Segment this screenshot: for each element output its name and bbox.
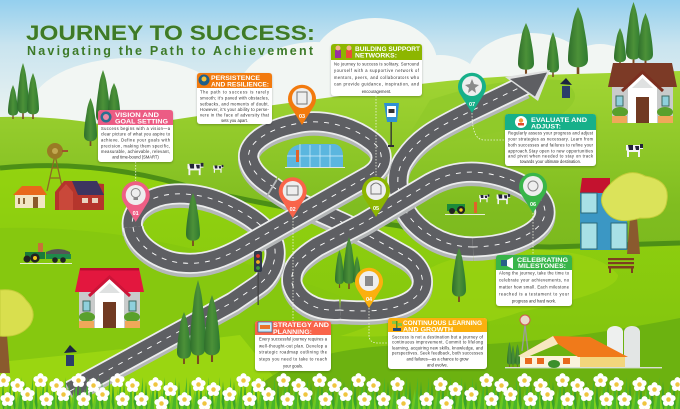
trees on road [177, 193, 466, 364]
card: celebrating milestones: reached is a testament to your [499, 292, 570, 296]
card: building support networks: can provide guidance, inspiration, and [334, 82, 420, 86]
windmill [47, 143, 68, 191]
card: strategy and planning: Every successful journey requires a [259, 336, 328, 342]
card: celebrating milestones: matter how small. Each milestone [499, 284, 570, 290]
card: building support networks: mentors, peers, and collaborators who [334, 75, 420, 80]
pin 04: 04 [366, 297, 373, 303]
card: evaluate and adjust: EVALUATE AND [531, 117, 587, 124]
card: vision and goal setting [98, 110, 173, 162]
card: building support networks: yourself with a supportive network of [334, 68, 420, 73]
road: start and left loop top [70, 194, 275, 394]
card: evaluate and adjust: towards your ultimate destination. [520, 159, 581, 164]
card: persistence and resilience: PERSISTENCE [211, 75, 261, 82]
trash bins [64, 78, 572, 366]
pin 01: 01 [133, 211, 139, 217]
card: vision and goal setting: precision, making them specific, [101, 144, 170, 148]
card: evaluate and adjust: approach.Stay open to new opportunities [508, 148, 593, 154]
red barn [55, 181, 104, 210]
card: building support networks: encouragement. [362, 89, 391, 94]
dotted connectors [136, 96, 533, 343]
card: strategy and planning: STRATEGY AND [273, 322, 329, 329]
icon: megaphone [501, 257, 513, 269]
pin 02: 02 [290, 207, 296, 213]
card: evaluate and adjust: ADJUST: [531, 124, 561, 130]
red roof house [75, 268, 144, 328]
pin 07 [458, 73, 486, 113]
icon: monitor [258, 322, 272, 332]
icon: plant growth [392, 321, 402, 331]
card: celebrating milestones: Along the journey, take the time to [499, 270, 570, 276]
card: building support networks: NETWORKS: [355, 52, 397, 60]
field waves [0, 228, 680, 409]
card: strategy and planning [255, 321, 331, 371]
icon: target head [100, 112, 112, 122]
card: vision and goal setting: VISION AND [115, 112, 159, 119]
card: vision and goal setting: GOAL SETTING [115, 118, 168, 126]
road: lower middle loop [272, 186, 422, 314]
pin 07: 07 [469, 102, 475, 108]
pin 05: 05 [373, 206, 379, 212]
clouds [30, 18, 640, 162]
icon: people [335, 46, 352, 58]
card: celebrating milestones: progress and hard work. [512, 298, 556, 304]
card: continuous learning and growth: learning, acquiring new skills, knowledge, and [392, 346, 484, 350]
pin 03 [288, 85, 316, 125]
card: persistence and resilience: sets you apart. [221, 118, 248, 123]
brown roof house [608, 63, 677, 123]
road: right loop [292, 172, 545, 314]
sky background [0, 0, 680, 130]
trees group [8, 2, 653, 146]
card: strategy and planning: well-thought-out plan. Develop a [259, 344, 328, 348]
title: Navigating the Path to Achievement [27, 44, 314, 58]
yellow tree [602, 173, 667, 254]
tractor middle [445, 202, 485, 215]
greenhouse [285, 144, 345, 168]
card: persistence and resilience: setbacks, and moments of doubt. [200, 102, 269, 106]
card: vision and goal setting: measurable, achievable, relevant, [101, 149, 170, 154]
card: persistence and resilience [197, 73, 272, 124]
card: persistence and resilience: smooth; it's paved with obstacles, [200, 96, 269, 100]
road: left loop bottom and top loop [133, 122, 381, 267]
tractor left [20, 243, 72, 264]
pin 06: 06 [530, 202, 536, 208]
card: vision and goal setting: achieve. Define your goals with [101, 138, 171, 142]
card: continuous learning and growth: Success is not a destination but a journey of [392, 334, 484, 340]
card: strategy and planning: your goals. [283, 364, 303, 368]
daisies [0, 373, 680, 409]
small farmhouse [13, 186, 47, 208]
card: celebrating milestones [496, 255, 572, 306]
pin 05 [362, 177, 390, 217]
pin 04 [355, 268, 383, 308]
road: final stretch with arrow [398, 70, 550, 250]
left tree [0, 290, 33, 373]
road network [70, 70, 550, 394]
card: persistence and resilience: The path to success is rarely [200, 90, 270, 94]
card: building support networks: No journey to success is solitary. Surround [334, 62, 420, 66]
card: continuous learning and growth [388, 318, 487, 369]
card: strategy and planning: PLANNING: [273, 329, 312, 336]
light hill patch [400, 79, 575, 150]
card: building support networks [331, 44, 422, 96]
dark hill band [0, 166, 680, 247]
card: continuous learning and growth: continuous improvement. Commit to lifelong [392, 340, 484, 344]
card: celebrating milestones: celebrate your achievements, no [499, 278, 570, 282]
card: continuous learning and growth: AND GROWTH [403, 326, 453, 334]
card: continuous learning and growth: and failures—as a chance to grow [407, 356, 468, 362]
icon: head with gear [198, 74, 210, 86]
card: evaluate and adjust: your strategies as necessary. Learn from [508, 136, 594, 142]
card: celebrating milestones: CELEBRATING [517, 257, 568, 264]
card: persistence and resilience: However, it's your ability to perse- [200, 107, 270, 112]
foreground field [0, 168, 680, 409]
card: building support networks: BUILDING SUPPORT [355, 46, 420, 53]
card: persistence and resilience: vere in the face of adversity that [200, 112, 270, 118]
card: celebrating milestones: MILESTONES: [518, 263, 566, 270]
card: continuous learning and growth: CONTINUOUS LEARNING [403, 320, 482, 327]
farm [505, 315, 662, 368]
card: continuous learning and growth: and evolve. [427, 362, 448, 368]
card: evaluate and adjust: Regularly assess your progress and adjust [508, 130, 594, 136]
bench [608, 258, 634, 273]
card: strategy and planning: steps you need to take to reach [259, 356, 328, 362]
card: evaluate and adjust: and pivot when needed to stay on track [508, 154, 594, 158]
card: strategy and planning: strategic roadmap outlining the [259, 350, 328, 354]
card: evaluate and adjust [505, 114, 596, 166]
pin 02 [279, 177, 307, 218]
card: evaluate and adjust: both successes and failures to refine your [508, 142, 594, 148]
traffic light [254, 251, 262, 305]
grass strip [0, 375, 680, 409]
icon: person badge [515, 116, 527, 128]
title: JOURNEY TO SUCCESS: [26, 22, 315, 45]
cows [188, 144, 643, 204]
card: vision and goal setting: and time-bound (SMART) [112, 154, 159, 160]
bus stop sign [384, 103, 399, 147]
blue house [580, 178, 627, 250]
card: vision and goal setting: Success begins with a vision—a [101, 126, 171, 131]
pin 06 [519, 173, 547, 213]
card: persistence and resilience: AND RESILIENCE: [211, 82, 269, 88]
card: continuous learning and growth: perspectives. Seek feedback, both successes [392, 350, 483, 356]
pin 03: 03 [299, 114, 305, 120]
pin 01 [122, 181, 150, 222]
card: vision and goal setting: clear picture of what you aspire to [101, 132, 171, 136]
title [26, 22, 315, 58]
